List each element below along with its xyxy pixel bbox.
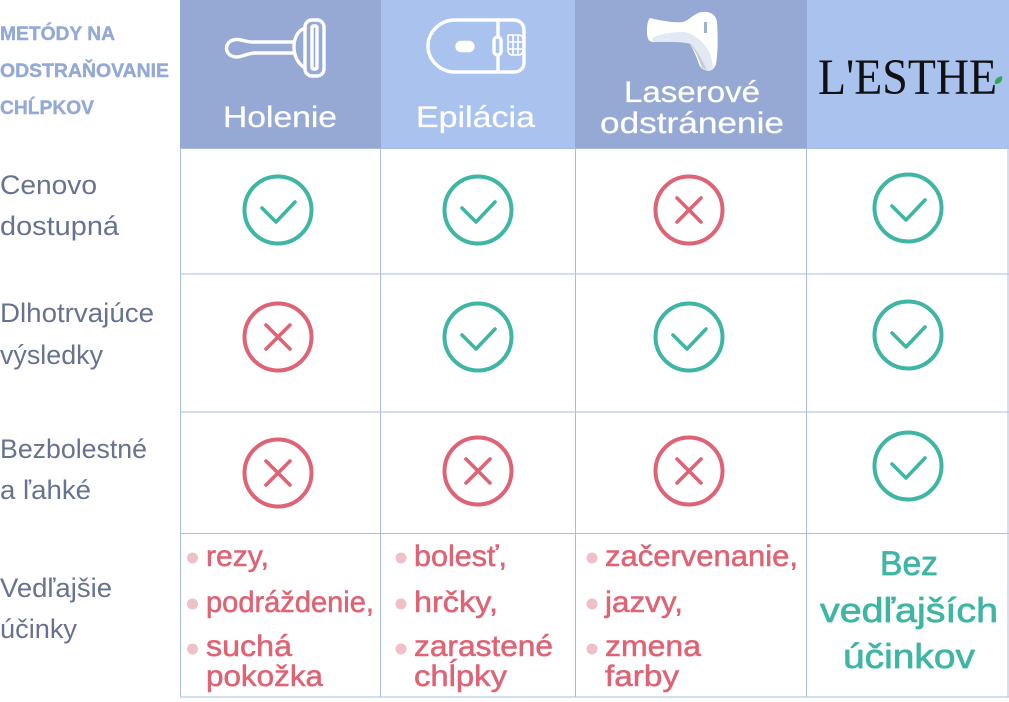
side effects: Epilácia [396, 540, 553, 693]
side effects: Epilácia: hrčky, [414, 586, 498, 619]
icon: epilator [428, 20, 524, 72]
table grid [180, 148, 1009, 697]
column header: Laserové odstránenie [600, 12, 784, 140]
row 3 marks [244, 432, 942, 506]
icon: check [444, 176, 512, 244]
heading: hair removal methods: CHĹPKOV [0, 97, 94, 119]
side effects: L'ESTHE none: vedľajších [820, 592, 998, 630]
row label: Cenovo dostupná [0, 170, 120, 241]
side effects: Epilácia: chĺpky [414, 659, 507, 693]
panel: header backgrounds [180, 0, 1009, 148]
row label: Vedľajšie účinky: účinky [0, 614, 78, 644]
heading: hair removal methods [0, 23, 169, 119]
icon: razor [226, 20, 324, 76]
icon: cross [244, 304, 312, 370]
side effects: Laserové odstránenie: zmena [605, 630, 701, 663]
column header: Laserové odstránenie: Laserové [624, 76, 760, 109]
side effects: Laserové odstránenie: jazvy, [604, 586, 683, 619]
icon: laser device [647, 12, 718, 71]
icon: cross [244, 440, 312, 506]
row label: Cenovo dostupná: dostupná [0, 211, 120, 241]
row 2 marks [244, 302, 942, 370]
side effects: Holenie: pokožka [206, 660, 323, 693]
side effects: Laserové odstránenie: farby [605, 660, 679, 693]
icon: check [244, 176, 312, 244]
side effects: Laserové odstránenie: začervenanie, [605, 540, 798, 573]
row label: Bezbolestné a ľahké [0, 434, 147, 505]
icon: check [444, 304, 512, 370]
side effects: Holenie: suchá [206, 630, 292, 663]
column header: Epilácia [416, 20, 535, 134]
side effects: Laserové odstránenie [586, 540, 798, 693]
heading: hair removal methods: ODSTRAŇOVANIE [0, 60, 169, 82]
side effects: L'ESTHE none: účinkov [843, 638, 975, 676]
icon: cross [656, 176, 722, 244]
column header: Laserové odstránenie: odstránenie [600, 107, 784, 140]
side effects: Holenie: podráždenie, [206, 586, 374, 619]
icon: check [656, 304, 722, 370]
column header: Epilácia: Epilácia [416, 101, 535, 134]
row label: Cenovo dostupná: Cenovo [0, 170, 97, 200]
icon: check [874, 302, 942, 368]
side effects: Epilácia: bolesť, [414, 540, 507, 573]
icon: cross [656, 438, 722, 504]
heading: hair removal methods: METÓDY NA [0, 23, 115, 45]
icon: check [874, 174, 942, 242]
icon: green leaf [995, 76, 1002, 84]
row label: Bezbolestné a ľahké: Bezbolestné [0, 434, 147, 464]
row 1 marks [244, 174, 942, 244]
row label: Dlhotrvajúce výsledky: Dlhotrvajúce [0, 298, 154, 328]
row label: Vedľajšie účinky [0, 573, 112, 644]
side effects: L'ESTHE none [820, 545, 998, 676]
row label: Dlhotrvajúce výsledky [0, 298, 154, 370]
side effects: Holenie [187, 540, 374, 693]
side effects: L'ESTHE none: Bez [880, 545, 938, 583]
row label: Dlhotrvajúce výsledky: výsledky [0, 340, 103, 370]
row label: Vedľajšie účinky: Vedľajšie [0, 573, 112, 603]
side effects: Holenie: rezy, [206, 540, 269, 573]
column header: Holenie: Holenie [223, 101, 337, 134]
row label: Bezbolestné a ľahké: a ľahké [0, 475, 91, 505]
side effects: Epilácia: zarastené [414, 630, 553, 663]
icon: check [874, 432, 942, 500]
column header: Holenie [223, 20, 337, 134]
icon: cross [444, 438, 512, 504]
